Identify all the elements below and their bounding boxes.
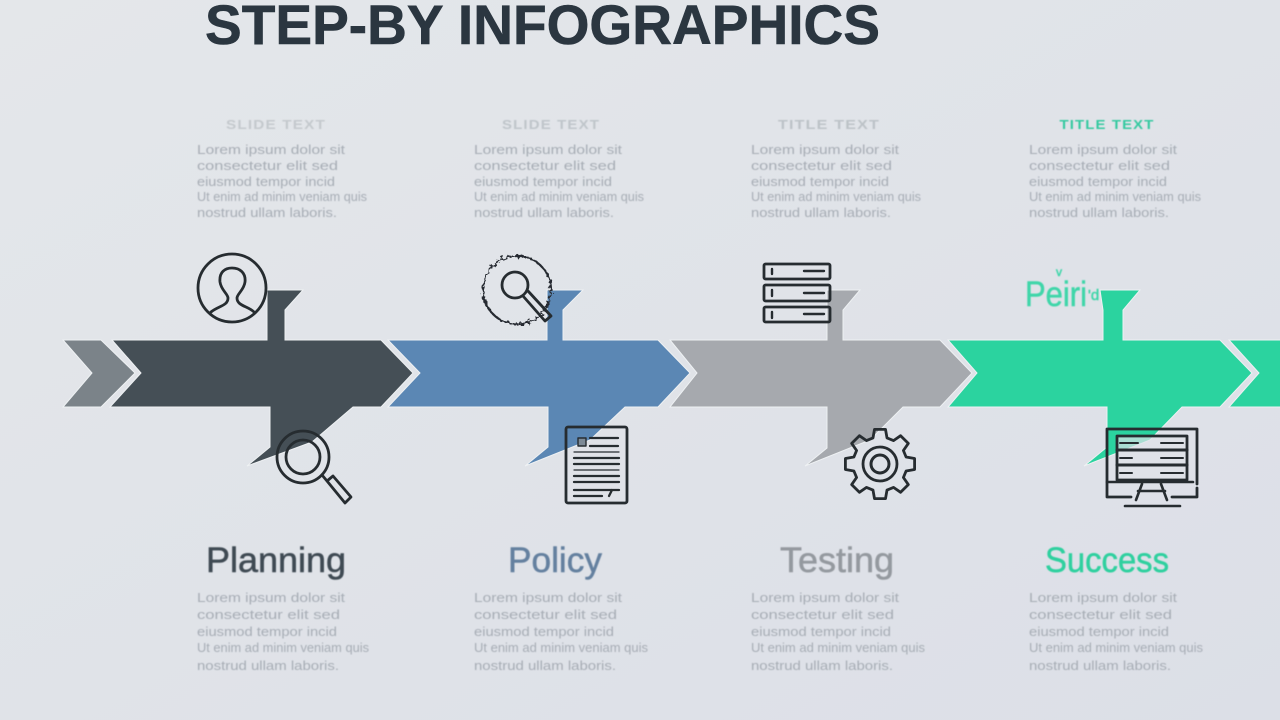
top text block: column 1: nostrud ullam laboris. [197, 206, 337, 220]
step: testing: nostrud ullam laboris. [751, 659, 893, 673]
step: policy: eiusmod tempor incid [474, 625, 614, 639]
top text block: column 4: Lorem ipsum dolor sit [1029, 143, 1178, 157]
step: success: consectetur elit sed [1029, 608, 1172, 622]
top text block: column 3: eiusmod tempor incid [751, 175, 889, 189]
step: planning: Ut enim ad minim veniam quis [197, 641, 369, 655]
top text block: column 4: consectetur elit sed [1029, 159, 1170, 173]
top text block: column 4: nostrud ullam laboris. [1029, 206, 1169, 220]
step: testing: Testing [780, 541, 894, 580]
top text block: column 2: Ut enim ad minim veniam quis [474, 190, 644, 204]
top text block: column 2: eiusmod tempor incid [474, 175, 612, 189]
step: success [1029, 541, 1203, 673]
step: success: nostrud ullam laboris. [1029, 659, 1171, 673]
top text block: column 4: Ut enim ad minim veniam quis [1029, 190, 1201, 204]
step: success: Success [1045, 541, 1169, 580]
top text block: column 3: consectetur elit sed [751, 159, 892, 173]
icon: server stack [764, 264, 830, 322]
step: planning: consectetur elit sed [197, 608, 340, 622]
top text block: column 2: consectetur elit sed [474, 159, 616, 173]
top text block: column 2 [474, 117, 644, 220]
step: testing: Ut enim ad minim veniam quis [751, 641, 925, 655]
arrow: planning (dark) [110, 290, 413, 466]
icon: magnifier [277, 431, 351, 503]
top text block: column 1: SLIDE TEXT [226, 117, 326, 132]
top text block: column 1: consectetur elit sed [197, 159, 338, 173]
icon: garbled green label: Peiri [1025, 275, 1087, 314]
top text block: column 4: eiusmod tempor incid [1029, 175, 1167, 189]
arrow: testing (gray) [670, 290, 972, 466]
step: policy [474, 541, 648, 673]
step: testing: consectetur elit sed [751, 608, 894, 622]
step: testing: Lorem ipsum dolor sit [751, 591, 900, 605]
arrow: policy (blue) [388, 290, 690, 466]
step: success: Ut enim ad minim veniam quis [1029, 641, 1203, 655]
arrow: success (green) [948, 290, 1252, 466]
top text block: column 3 [751, 117, 921, 220]
icon: garbled green label: v [1056, 265, 1062, 279]
step: planning: Planning [206, 541, 346, 580]
icon: magnifier with rough edge [483, 256, 551, 324]
icon: monitor [1107, 429, 1197, 506]
top text block: column 2: Lorem ipsum dolor sit [474, 143, 623, 157]
top text block: column 3: Ut enim ad minim veniam quis [751, 190, 921, 204]
top text block: column 2: nostrud ullam laboris. [474, 206, 614, 220]
step: policy: Lorem ipsum dolor sit [474, 591, 623, 605]
top text block: column 2: SLIDE TEXT [502, 117, 600, 132]
step: policy: Ut enim ad minim veniam quis [474, 641, 648, 655]
step: policy: consectetur elit sed [474, 608, 617, 622]
top text block: column 4: TITLE TEXT [1060, 117, 1154, 132]
top text block: column 1: eiusmod tempor incid [197, 175, 335, 189]
step: success: Lorem ipsum dolor sit [1029, 591, 1178, 605]
step: planning: nostrud ullam laboris. [197, 659, 339, 673]
top text block: column 1: Lorem ipsum dolor sit [197, 143, 346, 157]
top text block: column 1 [197, 117, 367, 220]
icon: garbled green label: 'd [1088, 287, 1099, 304]
step: planning: eiusmod tempor incid [197, 625, 337, 639]
top text block: column 3: nostrud ullam laboris. [751, 206, 891, 220]
left lead-in chevron [63, 340, 135, 407]
right lead-out chevron [1229, 340, 1280, 407]
step: testing: eiusmod tempor incid [751, 625, 891, 639]
step: policy: Policy [508, 541, 602, 580]
top text block: column 4 [1029, 117, 1201, 220]
top text block: column 3: TITLE TEXT [778, 117, 880, 132]
icon: document [566, 427, 627, 503]
step: policy: nostrud ullam laboris. [474, 659, 616, 673]
top text block: column 1: Ut enim ad minim veniam quis [197, 190, 367, 204]
icon: gear [845, 429, 915, 499]
step: testing [751, 541, 925, 673]
step: success: eiusmod tempor incid [1029, 625, 1169, 639]
top text block: column 3: Lorem ipsum dolor sit [751, 143, 900, 157]
timeline arrows [63, 290, 1280, 466]
step: planning: Lorem ipsum dolor sit [197, 591, 346, 605]
icon: person in circle [198, 254, 266, 322]
step: planning [197, 541, 369, 673]
